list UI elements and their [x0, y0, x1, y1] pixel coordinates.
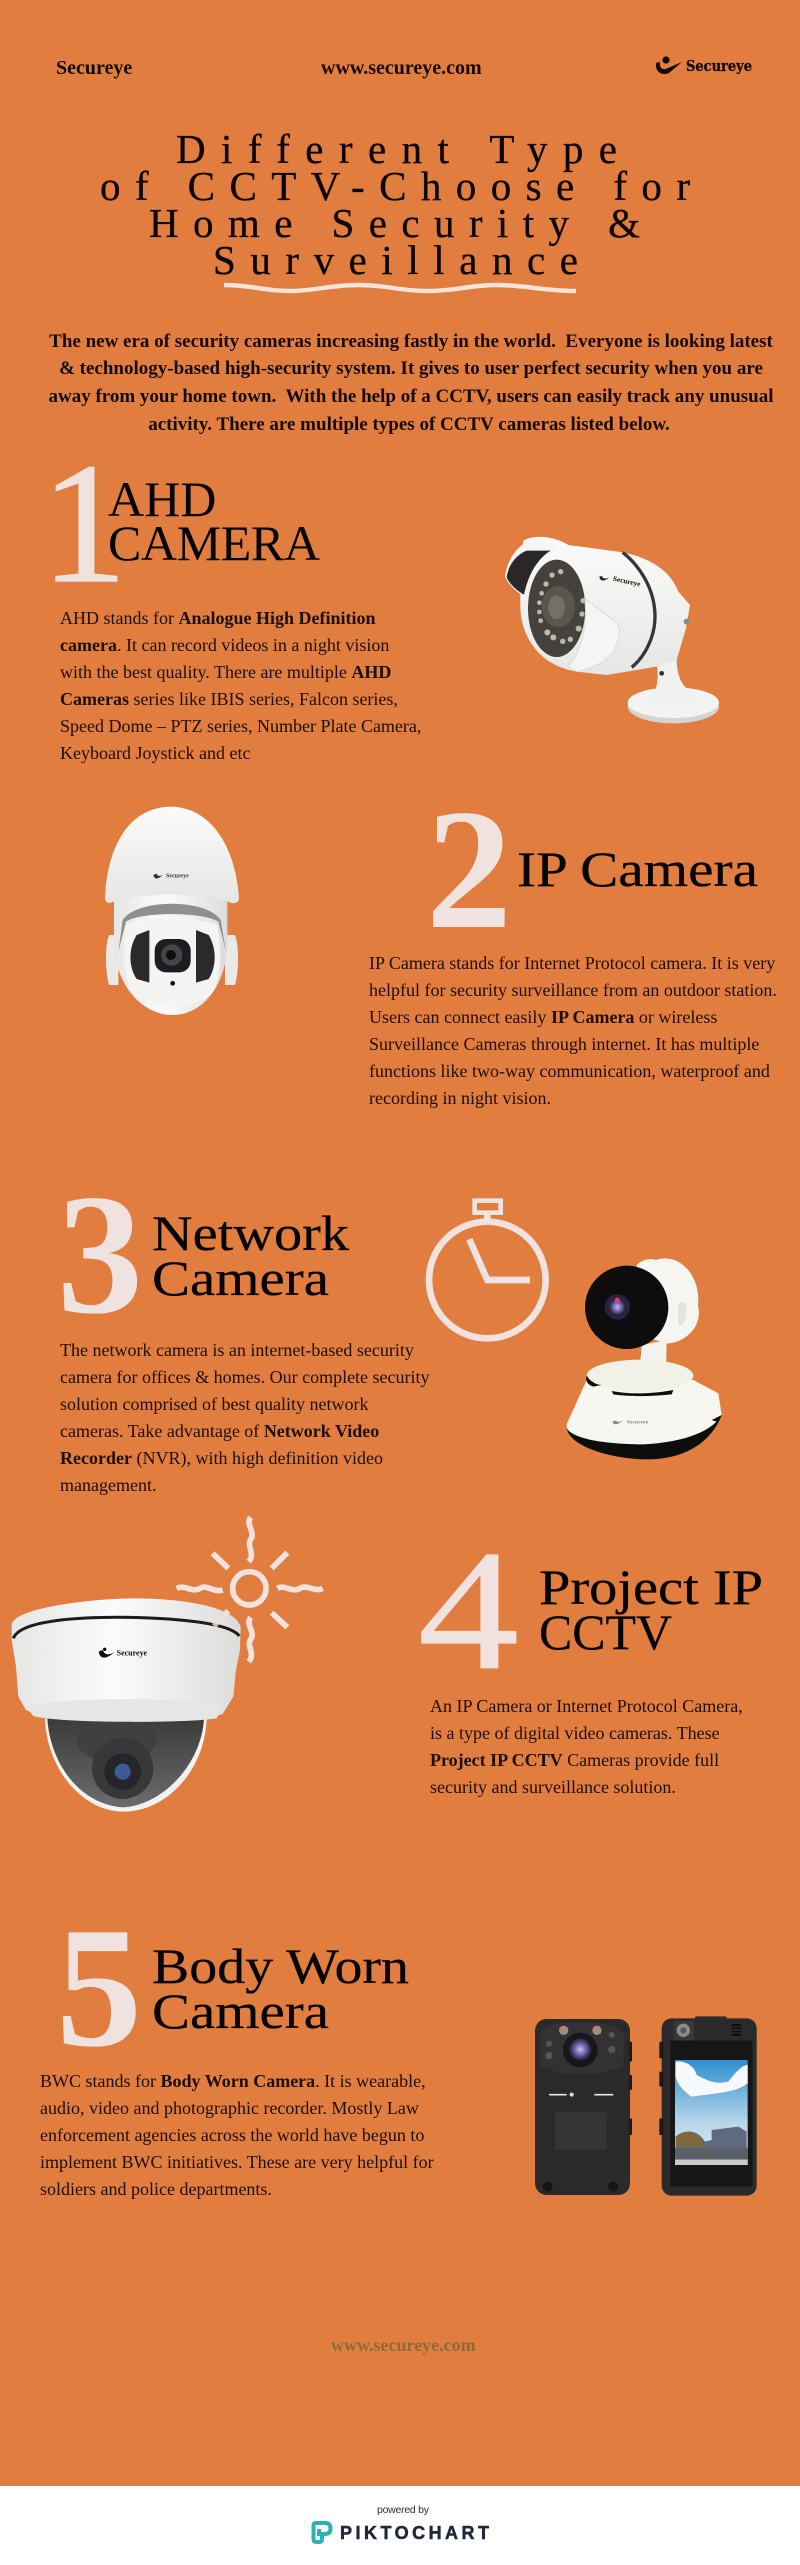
body text — [369, 953, 777, 1108]
heading — [108, 471, 320, 571]
body text — [60, 608, 421, 763]
wavy underline — [224, 285, 576, 291]
title: Home Security & — [149, 200, 640, 246]
body text: cameras. Take advantage of Network Video — [60, 1421, 379, 1441]
body text: with the best quality. There are multiple AHD — [60, 662, 391, 682]
body text: security and surveillance solution. — [430, 1777, 676, 1797]
heading: Network — [152, 1205, 349, 1261]
number 4: 4 — [418, 1514, 519, 1705]
footer: Piktochart band — [0, 2486, 800, 2565]
heading: Project IP — [539, 1559, 763, 1615]
body text — [60, 1340, 430, 1495]
footer website url: www.secureye.com — [331, 2335, 476, 2355]
body text: camera for offices & homes. Our complete security — [60, 1367, 430, 1387]
icon: stopwatch — [429, 1201, 546, 1338]
body text — [40, 2071, 434, 2199]
icon: body camera front — [535, 2019, 632, 2195]
number 2: 2 — [426, 775, 512, 965]
heading: Body Worn — [152, 1938, 409, 1994]
intro text — [48, 331, 774, 435]
intro text: away from your home town. With the help of a CCTV, users can easily track any unusual — [48, 386, 774, 407]
icon: network camera: Secureye — [627, 1419, 649, 1425]
body text: Keyboard Joystick and etc — [60, 743, 250, 763]
logo: Secureye — [656, 56, 752, 75]
icon: dome camera — [12, 1598, 241, 1812]
wordmark: PIKTOCHART — [340, 2523, 489, 2543]
icon: Piktochart logo — [314, 2523, 330, 2542]
heading: CCTV — [539, 1604, 672, 1660]
header — [56, 56, 752, 79]
heading: CAMERA — [108, 515, 320, 571]
icon: bullet camera — [505, 537, 719, 723]
powered by: powered by — [377, 2504, 430, 2516]
body text: soldiers and police departments. — [40, 2179, 272, 2199]
intro text: & technology-based high-security system. It gives to user perfect security when you are — [59, 358, 763, 379]
body text: implement BWC initiatives. These are very helpful for — [40, 2152, 434, 2172]
intro text: The new era of security cameras increasing fastly in the world. Everyone is looking latest — [49, 331, 774, 352]
title: Different Type — [176, 126, 617, 172]
heading: Camera — [152, 1250, 329, 1306]
icon: PTZ dome camera — [105, 807, 239, 1015]
icon: body camera back — [659, 2016, 757, 2196]
number 5: 5 — [56, 1893, 142, 2083]
body text: helpful for security surveillance from an outdoor station. — [369, 980, 777, 1000]
icon: dome camera: Secureye — [117, 1648, 148, 1657]
panel: Network camera — [57, 1160, 722, 1495]
icon: bullet camera: Secureye — [612, 574, 642, 589]
heading: IP Camera — [517, 841, 758, 897]
body text: IP Camera stands for Internet Protocol camera. It is very — [369, 953, 775, 973]
icon: network camera — [567, 1258, 722, 1459]
body text: Surveillance Cameras through internet. It has multiple — [369, 1034, 759, 1054]
panel: Body worn camera — [40, 1893, 757, 2199]
body text: functions like two-way communication, waterproof and — [369, 1061, 770, 1081]
body text: Recorder (NVR), with high definition video — [60, 1448, 383, 1469]
title — [100, 126, 690, 291]
logo: Secureye: Secureye — [686, 57, 752, 75]
body text: recording in night vision. — [369, 1088, 551, 1108]
title: of CCTV-Choose for — [100, 163, 690, 209]
body text: is a type of digital video cameras. These — [430, 1723, 720, 1743]
panel: AHD camera — [41, 429, 719, 763]
brand name: Secureye — [56, 57, 132, 79]
body text: solution comprised of best quality network — [60, 1394, 368, 1414]
body text: Project IP CCTV Cameras provide full — [430, 1750, 719, 1770]
number 1: 1 — [41, 429, 127, 619]
body text: audio, video and photographic recorder. Mostly Law — [40, 2098, 419, 2118]
icon: sun ray over camera — [214, 1611, 228, 1626]
body text: management. — [60, 1475, 156, 1495]
body text: BWC stands for Body Worn Camera. It is wearable, — [40, 2071, 426, 2091]
heading: Camera — [152, 1983, 329, 2039]
heading — [152, 1205, 349, 1306]
heading — [152, 1938, 409, 2039]
body text: Speed Dome – PTZ series, Number Plate Camera, — [60, 716, 421, 736]
panel: IP camera — [105, 775, 777, 1108]
body text: AHD stands for Analogue High Definition — [60, 608, 376, 628]
icon: sun — [177, 1517, 323, 1662]
intro text: activity. There are multiple types of CCTV cameras listed below. — [148, 414, 670, 435]
number 3: 3 — [57, 1160, 143, 1350]
title: Surveillance — [213, 237, 578, 283]
body text: The network camera is an internet-based security — [60, 1340, 414, 1360]
body text: Cameras series like IBIS series, Falcon series, — [60, 689, 398, 709]
body text — [430, 1696, 743, 1797]
icon: PTZ dome camera: Secureye — [166, 874, 189, 880]
body text: An IP Camera or Internet Protocol Camera, — [430, 1696, 743, 1716]
body text: camera. It can record videos in a night vision — [60, 635, 389, 655]
body text: enforcement agencies across the world have begun to — [40, 2125, 424, 2145]
panel: Project IP CCTV — [12, 1514, 763, 1812]
heading — [539, 1559, 763, 1660]
body text: Users can connect easily IP Camera or wireless — [369, 1007, 717, 1027]
website url: www.secureye.com — [321, 57, 482, 79]
heading: AHD — [108, 471, 216, 527]
